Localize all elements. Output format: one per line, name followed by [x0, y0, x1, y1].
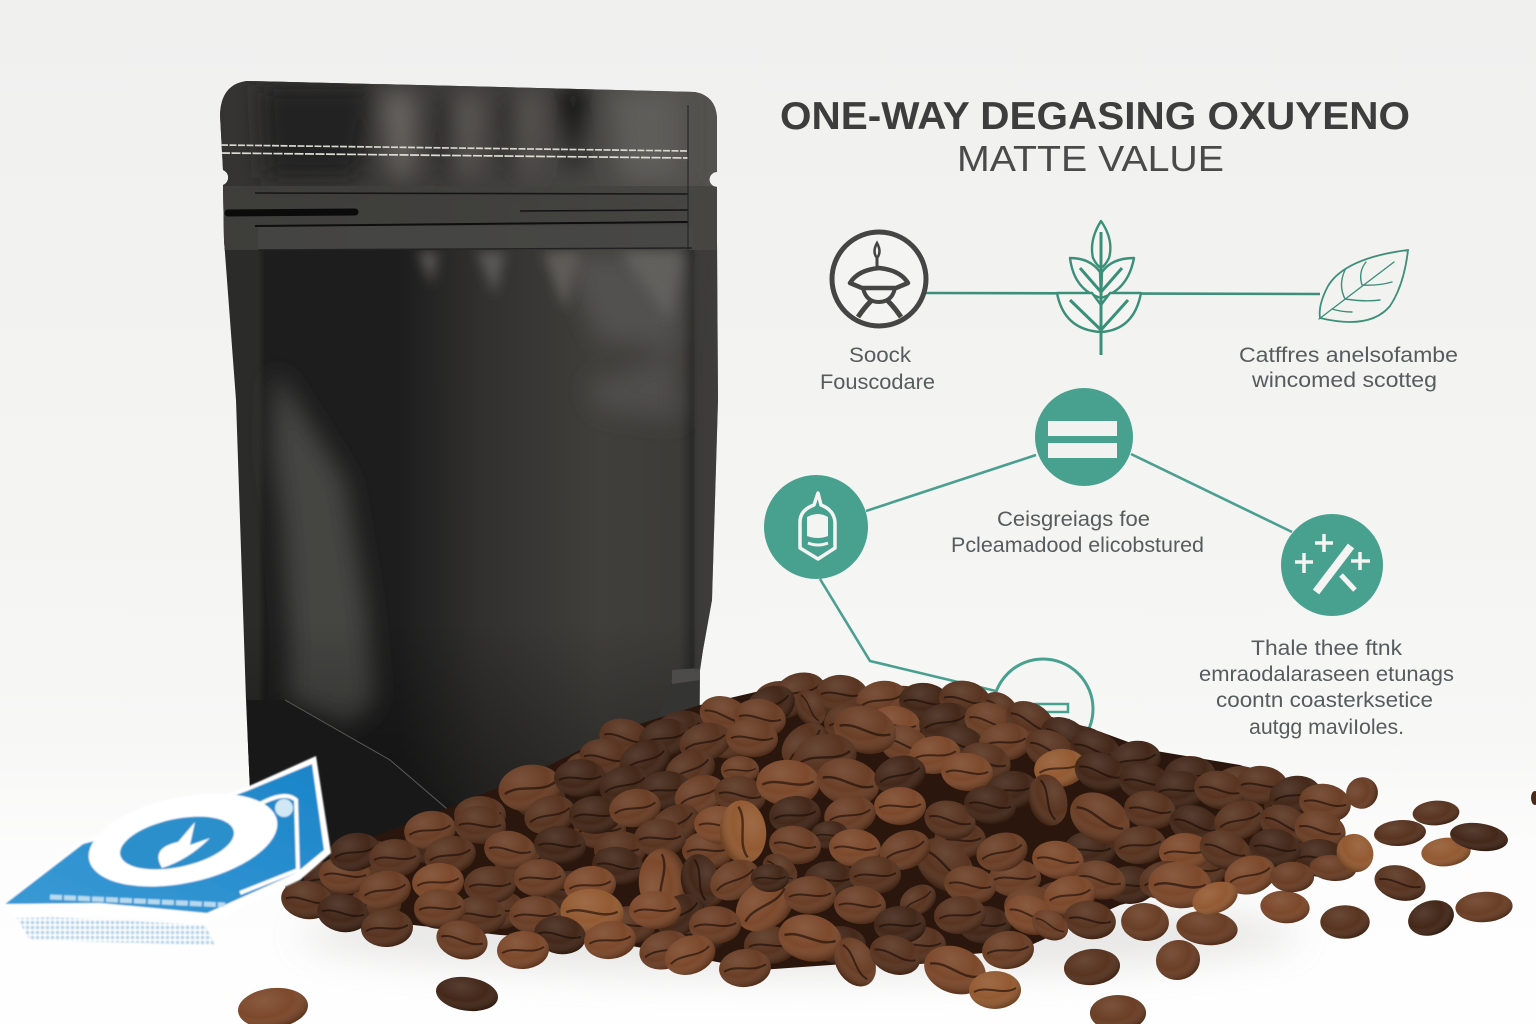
- subtitle: MATTE VALUE: [957, 138, 1224, 179]
- label: top right: [1239, 344, 1458, 392]
- icon: outlined leaf: [1319, 250, 1408, 322]
- label: lower right: [1199, 637, 1454, 739]
- title: [780, 95, 1410, 179]
- bean underlayer: [304, 673, 1341, 964]
- network connector lines: [820, 454, 1292, 692]
- label: lower right: emraodalaraseen etunags: [1199, 663, 1454, 686]
- label: top left: Soock: [849, 344, 912, 367]
- icon: teal circle with wand and plus signs: [1281, 514, 1383, 616]
- label: lower right: autgg maviIoles.: [1249, 716, 1404, 739]
- top connector line: [926, 293, 1320, 294]
- icon: grill in circle: [832, 232, 926, 326]
- icon: teal circle with valve: [764, 475, 868, 579]
- label: centre: [951, 508, 1204, 557]
- bottom gusset: [247, 700, 330, 888]
- label: lower right: Thale thee ftnk: [1251, 637, 1403, 660]
- stitch lines: [221, 145, 688, 151]
- blue oxygen absorber sachet: [0, 756, 331, 945]
- black matte coffee pouch: [215, 75, 725, 905]
- label: centre: Pcleamadood elicobstured: [951, 534, 1204, 557]
- label: top left: Fouscodare: [820, 371, 935, 394]
- scattered coffee beans: [236, 771, 1536, 1024]
- icon: outlined teal circle behind beans: [993, 659, 1093, 759]
- label: top right: Catffres anelsofambe: [1239, 344, 1458, 367]
- icon: teal circle with bars: [1035, 388, 1133, 486]
- label: lower right: coontn coasterksetice: [1216, 689, 1433, 712]
- title: ONE-WAY DEGASING OXUYENO: [780, 95, 1410, 138]
- bag top band: [215, 75, 725, 250]
- label: centre: Ceisgreiags foe: [997, 508, 1150, 531]
- pile shadow: [300, 895, 1300, 975]
- icon: green plant: [1057, 221, 1141, 355]
- coffee bean pile: [278, 667, 1354, 1009]
- label: top left: [820, 344, 935, 394]
- label: top right: wincomed scotteg: [1251, 369, 1437, 392]
